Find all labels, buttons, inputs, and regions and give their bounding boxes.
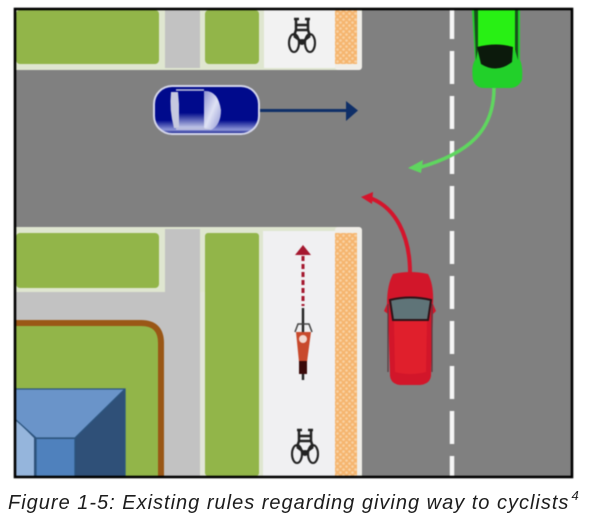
icon: blue building [16,389,125,476]
green car with turning arrow [408,10,522,173]
icon: upper cycle lane bicycle [289,19,315,52]
caption: Figure 1-5: Existing rules regarding giving way to cyclists4 [8,488,580,514]
cyclist with dashed red arrow [295,245,312,380]
panel: property lot with brown boundary [16,323,161,476]
icon: lower cycle lane bicycle [292,430,318,463]
panel: upper-left kerbed block with pavement and cycle lane [16,10,362,70]
dashed road centre line [450,10,454,476]
red car with turning arrow [361,192,436,385]
panel: lower-left kerbed block with pavement and cycle lane [16,227,362,476]
blue car with straight-ahead arrow [153,85,358,135]
